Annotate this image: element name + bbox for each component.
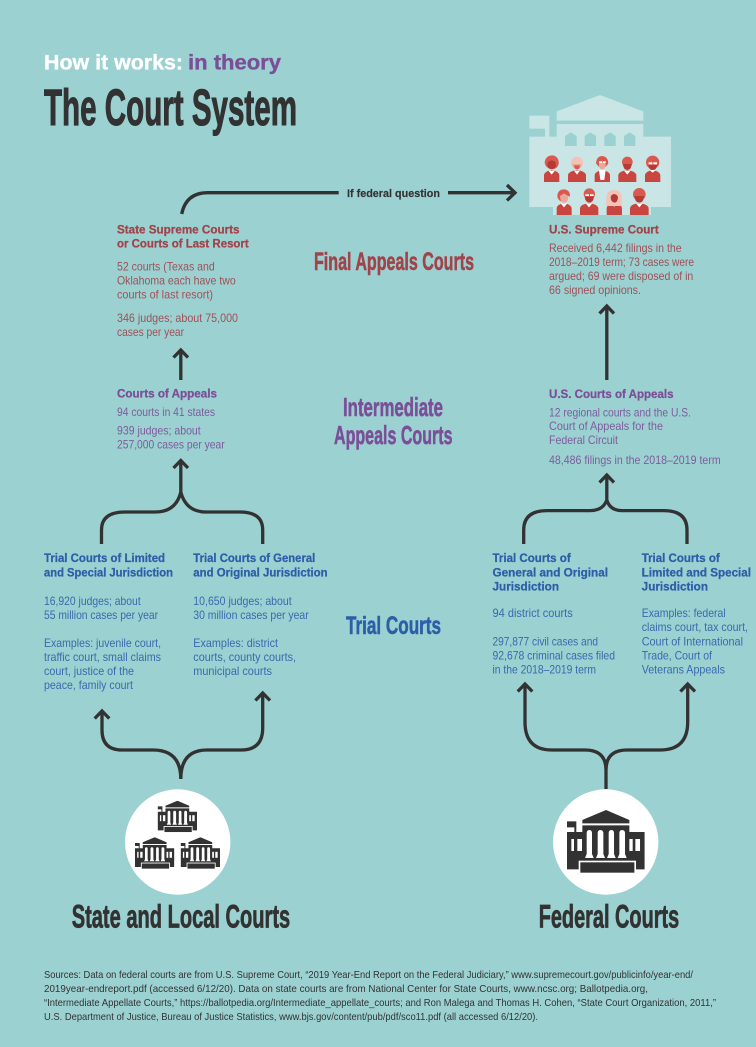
heading: Intermediate Appeals Courts: Appeals Courts	[334, 420, 452, 450]
arrow: federal courts split	[518, 684, 695, 789]
panel: state trial courts general: municipal courts	[193, 665, 272, 678]
panel: state supreme courts: courts of last resort)	[117, 288, 213, 302]
panel: state trial courts limited: Examples: juvenile court,	[44, 637, 161, 650]
panel: state trial courts general: Examples: district	[193, 637, 279, 650]
panel: federal trial courts general: 92,678 criminal cases filed	[492, 650, 615, 662]
panel: state trial courts general: 30 million cases per year	[193, 609, 309, 622]
panel: U.S. courts of appeals: U.S. Courts of Appeals	[549, 388, 674, 401]
kicker: How it works: in theory: How it works:	[44, 52, 183, 74]
panel: courts of appeals	[117, 388, 225, 452]
panel: federal trial courts limited: Court of International	[642, 636, 743, 648]
panel: federal trial courts general: 297,877 civil cases and	[492, 636, 598, 648]
sources: U.S. Department of Justice, Bureau of Justice Statistics, www.bjs.gov/content/pub/pdf/sco11.pdf (all accessed 6/12/20).	[44, 1011, 538, 1023]
heading: Trial Courts: Trial Courts	[346, 612, 441, 640]
panel: state trial courts limited: traffic court, small claims	[44, 651, 161, 664]
panel: state supreme courts: 52 courts (Texas and	[117, 261, 215, 274]
arrow: state trial courts merge to appeals	[102, 460, 263, 544]
panel: federal trial courts limited: Veterans Appeals	[642, 664, 725, 676]
kicker: How it works: in theory	[44, 52, 281, 74]
panel: U.S. courts of appeals	[549, 388, 721, 467]
kicker: How it works: in theory: in theory	[188, 52, 281, 74]
panel: federal trial courts general: 94 district courts	[492, 607, 573, 620]
panel: state supreme courts: or Courts of Last Resort	[117, 238, 249, 251]
heading: Final Appeals Courts: Final Appeals Courts	[314, 248, 474, 276]
panel: federal trial courts general	[492, 552, 615, 676]
panel: U.S. Supreme Court: 2018–2019 term; 73 cases were	[549, 256, 694, 269]
panel: state trial courts general: Trial Courts of General	[193, 552, 315, 565]
panel: state supreme courts: Oklahoma each have two	[117, 275, 236, 288]
arrow: state and local courts split	[95, 693, 270, 779]
panel: federal trial courts limited: claims court, tax court,	[642, 621, 748, 634]
panel: U.S. courts of appeals: Court of Appeals for the	[549, 420, 663, 433]
panel: U.S. courts of appeals: 12 regional courts and the U.S.	[549, 406, 691, 420]
panel: state trial courts limited: Trial Courts of Limited	[44, 552, 165, 565]
icon: U.S. Supreme Court building with justices	[529, 95, 671, 215]
arrow: if federal question	[182, 185, 515, 214]
heading: Intermediate Appeals Courts	[334, 392, 452, 450]
panel: federal trial courts limited: Jurisdiction	[642, 580, 708, 594]
sources: 2019year-endreport.pdf (accessed 6/12/20). Data on state courts are from National Center for State Courts, www.ncsc.org; Ballotpedia.org,	[44, 983, 648, 995]
icon: federal courts	[553, 789, 658, 895]
panel: federal trial courts limited: Examples: federal	[642, 607, 726, 620]
title: The Court System	[44, 79, 297, 136]
panel: courts of appeals: 257,000 cases per year	[117, 439, 225, 452]
arrow: U.S. appeals to supreme	[600, 306, 614, 380]
panel: state supreme courts: 346 judges; about 75,000	[117, 312, 238, 325]
panel: U.S. courts of appeals: 48,486 filings in the 2018–2019 term	[549, 454, 721, 467]
panel: courts of appeals: 939 judges; about	[117, 424, 201, 437]
panel: federal trial courts limited: Trial Courts of	[642, 552, 720, 565]
heading: State and Local Courts: State and Local Courts	[72, 898, 290, 934]
panel: federal trial courts limited	[642, 552, 751, 676]
panel: state trial courts general: and Original Jurisdiction	[193, 566, 328, 580]
sources	[44, 969, 716, 1023]
panel: state trial courts limited: and Special Jurisdiction	[44, 566, 173, 580]
panel: U.S. courts of appeals: Federal Circuit	[549, 434, 619, 447]
panel: U.S. Supreme Court: argued; 69 were disposed of in	[549, 270, 693, 283]
panel: federal trial courts general: Jurisdiction	[492, 580, 559, 594]
panel: federal trial courts general: in the 2018–2019 term	[492, 664, 596, 676]
panel: state trial courts general: courts, county courts,	[193, 651, 296, 664]
panel: state trial courts limited: 16,920 judges; about	[44, 595, 141, 608]
panel: courts of appeals: 94 courts in 41 states	[117, 406, 215, 419]
panel: state trial courts limited: peace, family court	[44, 679, 134, 692]
panel: state trial courts limited: 55 million cases per year	[44, 609, 158, 622]
panel: U.S. Supreme Court: 66 signed opinions.	[549, 284, 641, 297]
panel: state trial courts limited	[44, 552, 173, 692]
panel: U.S. Supreme Court: U.S. Supreme Court	[549, 224, 659, 236]
panel: U.S. Supreme Court	[549, 224, 694, 297]
panel: state trial courts general	[193, 552, 328, 678]
panel: state supreme courts	[117, 224, 249, 339]
arrow: courts of appeals to state supreme	[174, 350, 188, 380]
arrow: if federal question: If federal question	[347, 188, 440, 200]
panel: federal trial courts general: Trial Courts of	[492, 552, 571, 565]
sources: Sources: Data on federal courts are from U.S. Supreme Court, “2019 Year-End Report on the Federal Judiciary,” www.supremecourt.gov/publicinfo/year-end/	[44, 969, 693, 981]
panel: state supreme courts: State Supreme Courts	[117, 224, 240, 236]
panel: federal trial courts general: General and Original	[492, 567, 608, 580]
heading: Intermediate Appeals Courts: Intermediate	[343, 392, 443, 422]
panel: state supreme courts: cases per year	[117, 326, 184, 339]
panel: federal trial courts limited: Limited and Special	[642, 567, 751, 580]
panel: federal trial courts limited: Trade, Court of	[642, 650, 713, 662]
panel: courts of appeals: Courts of Appeals	[117, 388, 217, 401]
icon: state and local courts	[125, 789, 230, 895]
panel: state trial courts general: 10,650 judges; about	[193, 595, 292, 608]
panel: state trial courts limited: court, justice of the	[44, 665, 134, 678]
panel: U.S. Supreme Court: Received 6,442 filings in the	[549, 242, 682, 255]
arrow: federal trial courts merge to appeals	[524, 475, 687, 544]
